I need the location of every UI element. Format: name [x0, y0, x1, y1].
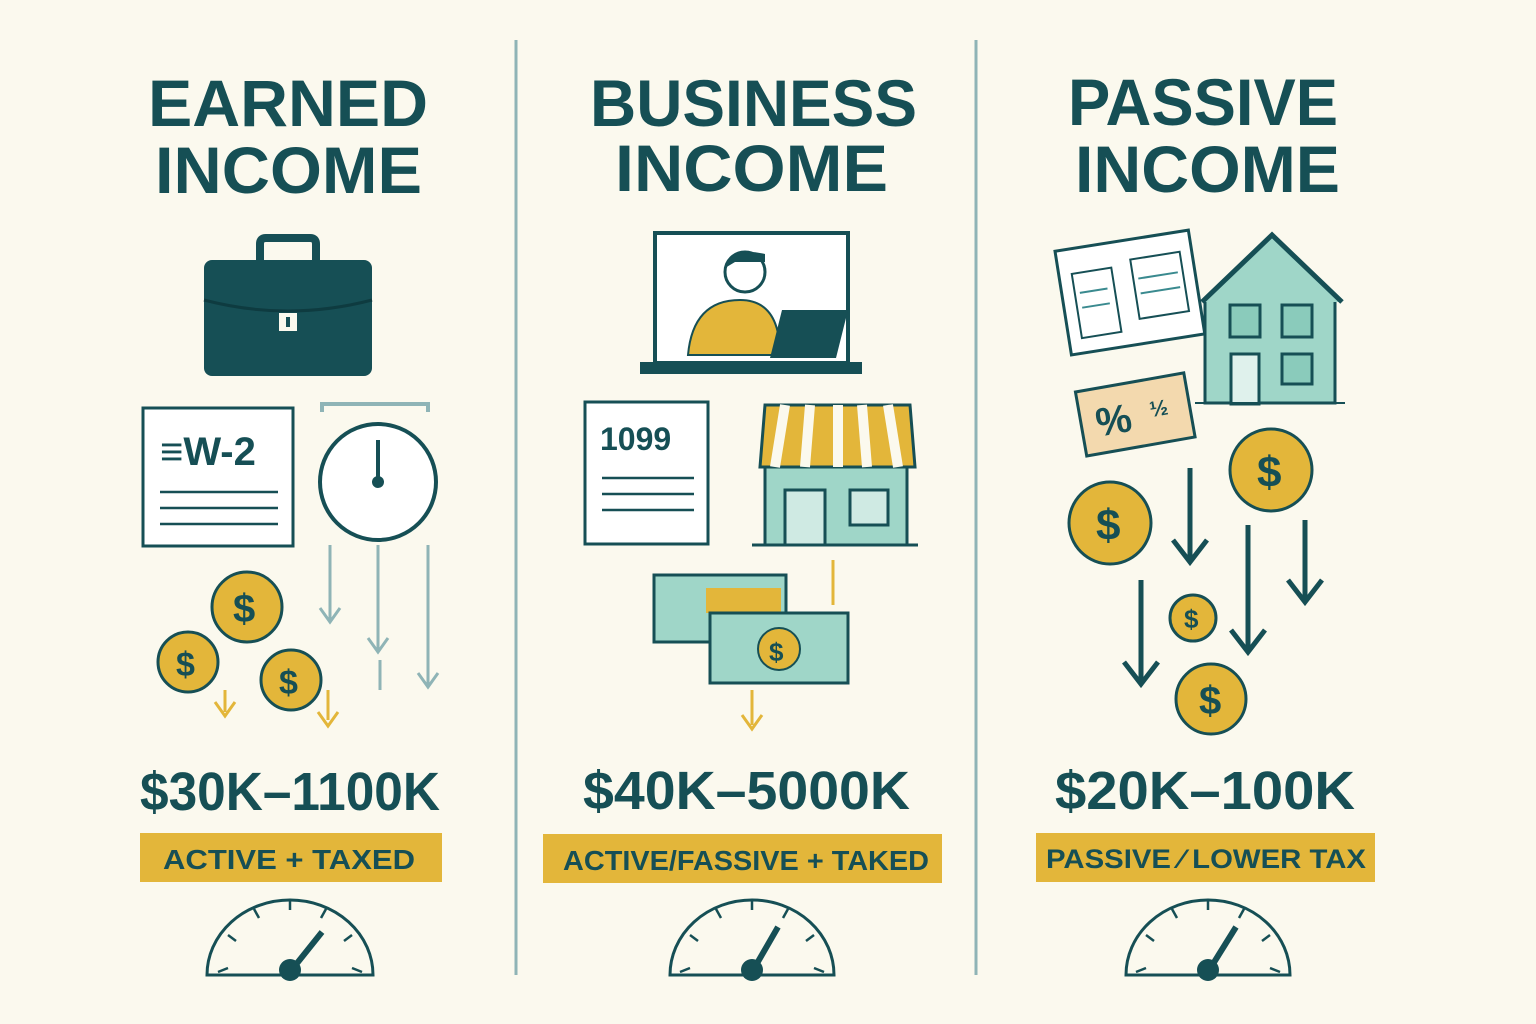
label: active/passive taxed: [543, 834, 942, 883]
icon: 1099 form: 1099: [600, 421, 671, 457]
icon: coins: $: [233, 587, 255, 631]
title: business income: BUSINESS: [590, 66, 917, 140]
label: active taxed: ACTIVE + TAXED: [163, 844, 415, 875]
icon: briefcase: [204, 238, 372, 376]
icon: coins and arrows: $: [1199, 679, 1221, 723]
title: earned income: EARNED: [148, 66, 428, 140]
icon: coins and arrows: [1069, 429, 1322, 734]
icon: coins: $: [176, 646, 195, 684]
title: business income: INCOME: [615, 131, 888, 205]
amount: earned: $30K–1100K: [140, 762, 440, 822]
icon: 1099 form: [585, 402, 708, 544]
icon: coins and arrows: $: [1184, 604, 1199, 634]
arrows: time down: [320, 545, 438, 690]
panel: passive income: [1036, 65, 1375, 981]
icon: house: [1195, 235, 1345, 404]
title: passive income: INCOME: [1075, 132, 1340, 206]
title: passive income: [1068, 65, 1340, 206]
icon: gauge: [1126, 900, 1290, 981]
icon: gauge: [207, 900, 373, 981]
icon: clock: [320, 404, 436, 540]
label: passive lower tax: PASSIVE ⁄ LOWER TAX: [1046, 844, 1366, 874]
icon: percent card: [1075, 373, 1195, 456]
title: passive income: PASSIVE: [1068, 65, 1338, 139]
icon: percent card: ½: [1148, 394, 1170, 422]
label: active/passive taxed: ACTIVE/FASSIVE + TAKED: [563, 845, 929, 876]
icon: storefront: [752, 405, 918, 545]
icon: person at laptop: [640, 233, 862, 374]
panel: earned income: [140, 66, 442, 981]
icon: coins: $: [279, 664, 298, 702]
icon: newspaper: [1055, 230, 1205, 355]
amount: business: $40K–5000K: [583, 761, 910, 821]
panel: business income: [543, 66, 942, 981]
amount: passive: $20K–100K: [1055, 761, 1355, 821]
title: earned income: [148, 66, 428, 207]
icon: cash bills: $: [769, 637, 784, 667]
icon: coins and arrows: $: [1096, 501, 1120, 550]
title: earned income: INCOME: [155, 133, 422, 207]
label: active taxed: [140, 833, 442, 882]
icon: coins: [158, 572, 338, 726]
label: passive lower tax: [1036, 833, 1375, 882]
title: business income: [590, 66, 917, 205]
icon: cash bills: [654, 560, 848, 729]
icon: W-2 form: ≡W-2: [160, 430, 256, 474]
icon: percent card: %: [1092, 396, 1135, 446]
icon: W-2 form: [143, 408, 293, 546]
icon: gauge: [670, 900, 834, 981]
icon: coins and arrows: $: [1257, 448, 1281, 497]
